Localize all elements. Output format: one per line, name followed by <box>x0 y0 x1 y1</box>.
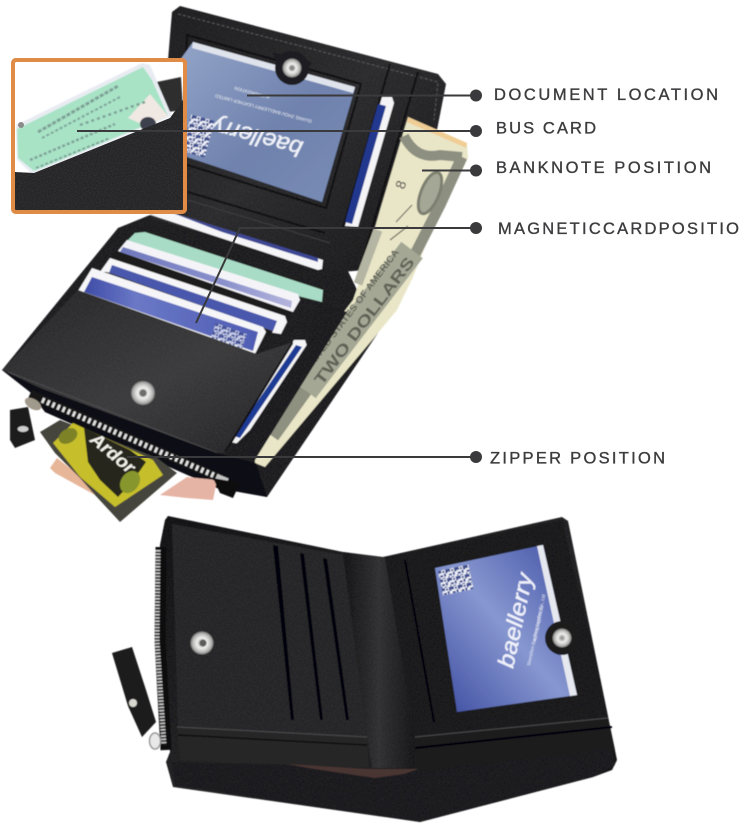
window snap button <box>272 51 312 85</box>
snack packet <box>40 420 177 522</box>
leader line: document location <box>247 90 482 102</box>
QR code <box>181 115 215 157</box>
window card: AUTHORIZATION <box>532 606 545 642</box>
window card: Shenzhen Baellerry Leather Co., Ltd <box>526 593 546 666</box>
side zipper <box>157 547 166 750</box>
banknote print: TWO DOLLARS <box>312 254 419 388</box>
blue card behind upper flap <box>345 97 394 227</box>
leader line: magnetic card position <box>196 222 482 323</box>
left pocket strips <box>177 727 369 768</box>
brown inner lining <box>287 764 418 780</box>
card 3 <box>118 240 300 312</box>
leather right pocket <box>228 303 347 466</box>
card slot: left 1 <box>273 545 294 720</box>
window snap button <box>545 621 579 655</box>
zipper end tab <box>213 478 240 498</box>
pocket snap button <box>131 381 155 405</box>
front pocket <box>2 290 293 453</box>
zipper pull <box>10 395 43 448</box>
ID window: AUTHORIZATION <box>234 86 270 100</box>
bottom black zipper band <box>2 370 267 497</box>
brand: baellerry <box>492 569 538 670</box>
inset orange border <box>13 60 185 212</box>
white and blue card, top pocket <box>148 212 323 270</box>
leader line: zipper position <box>127 451 482 463</box>
card slot: left 2 <box>300 553 323 720</box>
ID window: GUANG ZHOU BAELLERRY LEATHER LIMITED <box>214 93 312 124</box>
banknote <box>255 117 468 467</box>
lower wallet pocket <box>172 748 615 822</box>
label: bus card: BUS CARD <box>496 120 596 138</box>
right pocket strips <box>415 718 615 770</box>
label: zipper position: ZIPPER POSITION <box>490 450 665 468</box>
card slot: right <box>405 560 434 722</box>
side blue card <box>230 340 307 445</box>
inset black tab <box>152 77 183 112</box>
inset leather pocket <box>15 100 183 210</box>
label: document location: DOCUMENT LOCATION <box>494 86 718 104</box>
photo: open wallet with cards and banknote <box>2 6 468 522</box>
window brand text: baellerry <box>206 112 305 162</box>
card 1 with QR <box>78 268 266 354</box>
inset zipper pull detail <box>18 122 24 128</box>
card slot: left 3 <box>323 558 349 720</box>
left leather panel <box>172 524 367 737</box>
snack packet: Ardor <box>86 428 140 478</box>
leader line: banknote position <box>422 164 482 176</box>
centre fold <box>343 552 415 768</box>
leather slot strip 2 <box>108 251 292 319</box>
card 2 <box>100 258 287 334</box>
ID window <box>180 42 355 202</box>
inset ID card <box>16 63 172 174</box>
QR code <box>438 565 474 595</box>
pink banknote <box>50 458 217 500</box>
label: banknote position: BANKNOTE POSITION <box>496 159 711 177</box>
green card <box>127 232 323 302</box>
right leather panel <box>385 520 608 737</box>
zipper <box>30 394 229 484</box>
left snap button <box>190 632 214 654</box>
leather slot strip 3 <box>98 272 273 336</box>
wallet lower panel back <box>2 215 378 497</box>
banknote: 8 <box>392 178 410 191</box>
label: magnetic card position: MAGNETICCARDPOSITIO <box>498 220 739 238</box>
window card <box>435 545 577 712</box>
upper flap <box>150 6 446 272</box>
photo: empty open wallet view <box>112 516 617 822</box>
zipper puller <box>112 647 160 749</box>
banknote: UNITED STATES OF AMERICA <box>303 247 402 374</box>
leader line: bus card <box>77 125 482 137</box>
inset photo frame <box>13 60 185 212</box>
wallet body <box>160 516 617 822</box>
